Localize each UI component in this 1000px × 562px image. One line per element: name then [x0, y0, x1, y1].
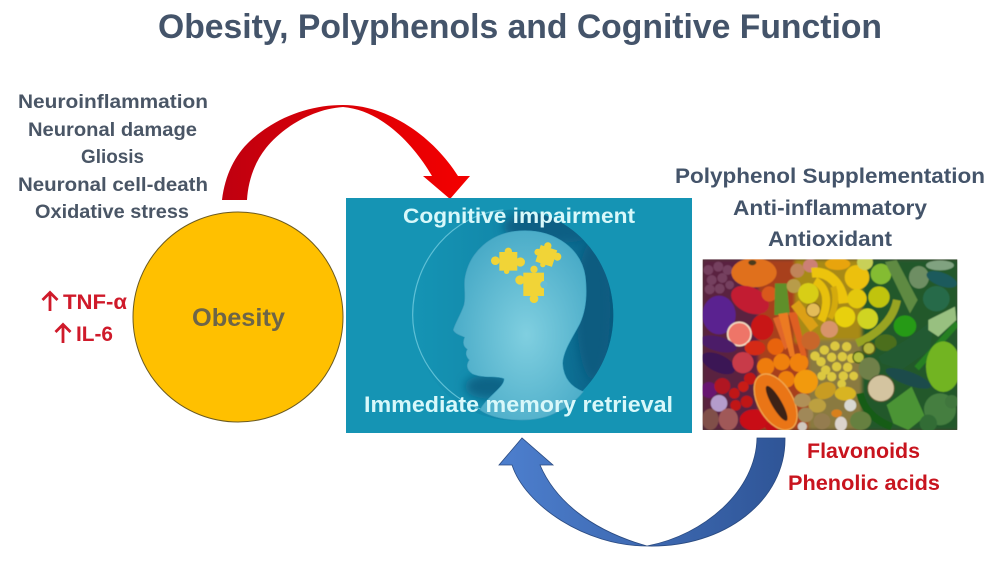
- arrow: polyphenols to cognitive function: [499, 438, 785, 546]
- red pepper: [751, 315, 774, 340]
- text block: polyphenol supplementation: Polyphenol Supplementation: [675, 164, 985, 188]
- eggplants: [702, 335, 737, 353]
- circle: obesity: [133, 212, 343, 422]
- text block: obesity effects: [18, 91, 208, 223]
- title: Obesity, Polyphenols and Cognitive Function: [158, 8, 882, 46]
- head illustration: [413, 210, 613, 420]
- text block: obesity effects: Neuronal damage: [28, 119, 197, 141]
- text block: cytokines: TNF-α: [63, 291, 127, 314]
- pumpkin: [731, 258, 777, 287]
- panel: cognitive impairment image: Immediate memory retrieval: [364, 392, 673, 417]
- tomatoes and apples: [745, 341, 765, 355]
- text block: polyphenol classes: Flavonoids: [807, 439, 920, 463]
- text block: polyphenol supplementation: Antioxidant: [768, 227, 892, 251]
- panel: cognitive impairment image: [346, 198, 692, 433]
- mango: [730, 285, 769, 315]
- kiwi and green items: [863, 342, 875, 354]
- circle: obesity: Obesity: [192, 304, 285, 332]
- bananas and yellow fruit: [795, 303, 814, 329]
- onions and peach: [801, 331, 820, 350]
- potatoes and pears: [814, 382, 836, 400]
- cabbage: [702, 296, 736, 334]
- text block: obesity effects: Oxidative stress: [35, 201, 189, 223]
- panel: cognitive impairment image: Cognitive impairment: [403, 204, 635, 228]
- text block: obesity effects: Gliosis: [81, 146, 144, 168]
- carrots: [774, 283, 790, 315]
- text block: cytokines: IL-6: [76, 323, 113, 346]
- greens: [888, 346, 896, 352]
- potatoes and red pepper: [702, 409, 719, 430]
- text block: polyphenol classes: [788, 439, 940, 495]
- text block: cytokines: [42, 291, 127, 346]
- text block: polyphenol classes: Phenolic acids: [788, 471, 940, 495]
- text block: polyphenol supplementation: Anti-inflammatory: [733, 196, 927, 220]
- text block: polyphenol supplementation: [675, 164, 985, 251]
- text block: obesity effects: Neuronal cell-death: [18, 174, 208, 196]
- text block: obesity effects: Neuroinflammation: [18, 91, 208, 113]
- image: fruits and vegetables: [698, 254, 961, 437]
- grapefruit: [728, 322, 751, 346]
- grapes: [703, 262, 734, 294]
- puzzle pieces: [491, 239, 565, 303]
- arrow: obesity to cognitive impairment: [222, 105, 470, 200]
- papaya: [752, 372, 798, 430]
- yellow grapes: [810, 341, 858, 388]
